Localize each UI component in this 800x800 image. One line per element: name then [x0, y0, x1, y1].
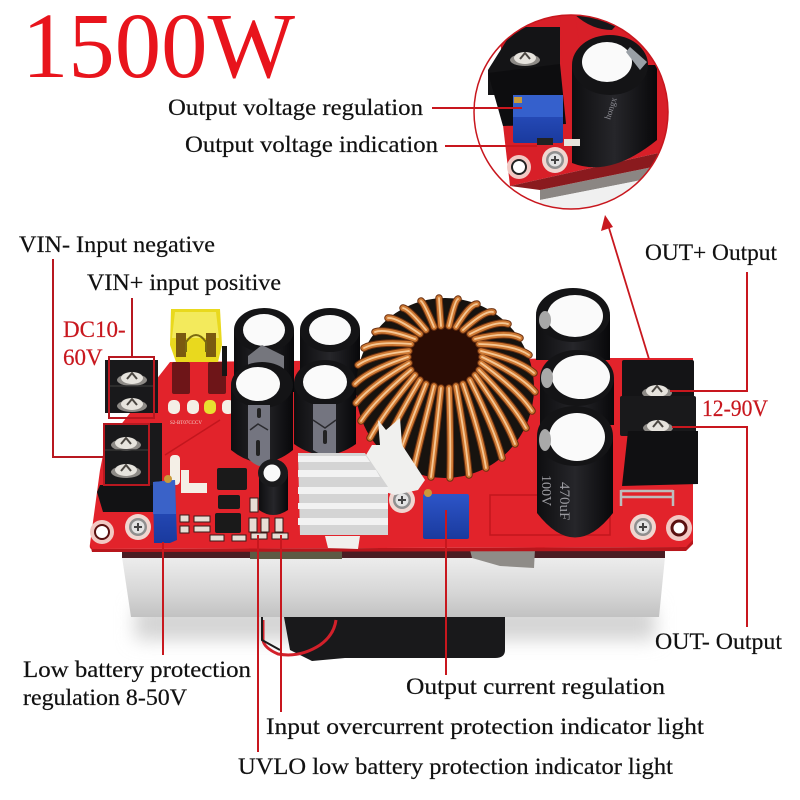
callout: VIN- input negative	[19, 232, 215, 485]
output voltage label and leader lines: 12-90V	[702, 396, 768, 421]
white solder pads	[168, 400, 234, 493]
chip heatsink	[298, 453, 388, 549]
input voltage label: DC10-	[63, 317, 126, 342]
callout: VIN+ input positive: VIN+ input positive	[87, 270, 281, 295]
capacitor front left	[231, 362, 293, 466]
capacitor front 470uF	[537, 406, 613, 538]
magnified inset: output adjustment	[474, 12, 672, 212]
callout: output voltage regulation: Output voltage regulation	[168, 95, 424, 120]
output capacitors	[536, 288, 614, 538]
capacitor middle	[540, 350, 614, 425]
capacitor front 470uF: 470uF	[556, 482, 572, 520]
input terminal block	[97, 360, 162, 512]
small capacitor	[258, 459, 288, 515]
callout: output current regulation: Output current regulation	[406, 674, 666, 699]
heatsink and cooling fan	[122, 549, 665, 661]
toroid inductor	[355, 298, 535, 478]
callout: input overcurrent indicator: Input overcurrent protection indicator light	[266, 714, 705, 739]
callout: VIN+ input positive	[87, 270, 281, 418]
capacitor rear	[536, 288, 610, 360]
blue trimmer: low battery protection	[153, 475, 177, 543]
callout: UVLO indicator: UVLO low battery protection indicator light	[238, 754, 674, 779]
circuit board	[90, 358, 693, 552]
callout: low battery protection regulation: Low battery protection	[23, 657, 252, 682]
capacitor front right	[294, 360, 356, 456]
input voltage label	[63, 317, 126, 370]
board mounting holes	[90, 487, 692, 544]
callout: OUT- output: OUT- Output	[655, 629, 783, 654]
yellow fuse	[170, 309, 227, 394]
magnified inset: output adjustment: hongx	[602, 96, 619, 121]
input capacitors	[231, 308, 360, 466]
callout: OUT+ output: OUT+ Output	[645, 240, 778, 265]
input voltage label: 60V	[63, 345, 103, 370]
output terminal block	[620, 360, 698, 506]
capacitor back right	[300, 308, 360, 395]
arrow: from output terminal to inset	[601, 215, 649, 359]
callout: low battery protection regulation	[23, 542, 252, 710]
capacitor front 470uF: 100V	[538, 475, 553, 506]
capacitor back left	[234, 308, 294, 392]
callout: low battery protection regulation: regulation 8-50V	[23, 685, 187, 710]
output voltage label and leader lines	[670, 272, 768, 627]
control chips and SMD parts	[180, 468, 288, 541]
blue trimmer: output current	[423, 489, 469, 539]
white silicone glue	[363, 418, 425, 495]
circuit board: S2-BT07CCCV	[170, 421, 202, 426]
callout: VIN- input negative: VIN- Input negative	[19, 232, 215, 257]
callout: output voltage indication: Output voltage indication	[185, 132, 439, 157]
